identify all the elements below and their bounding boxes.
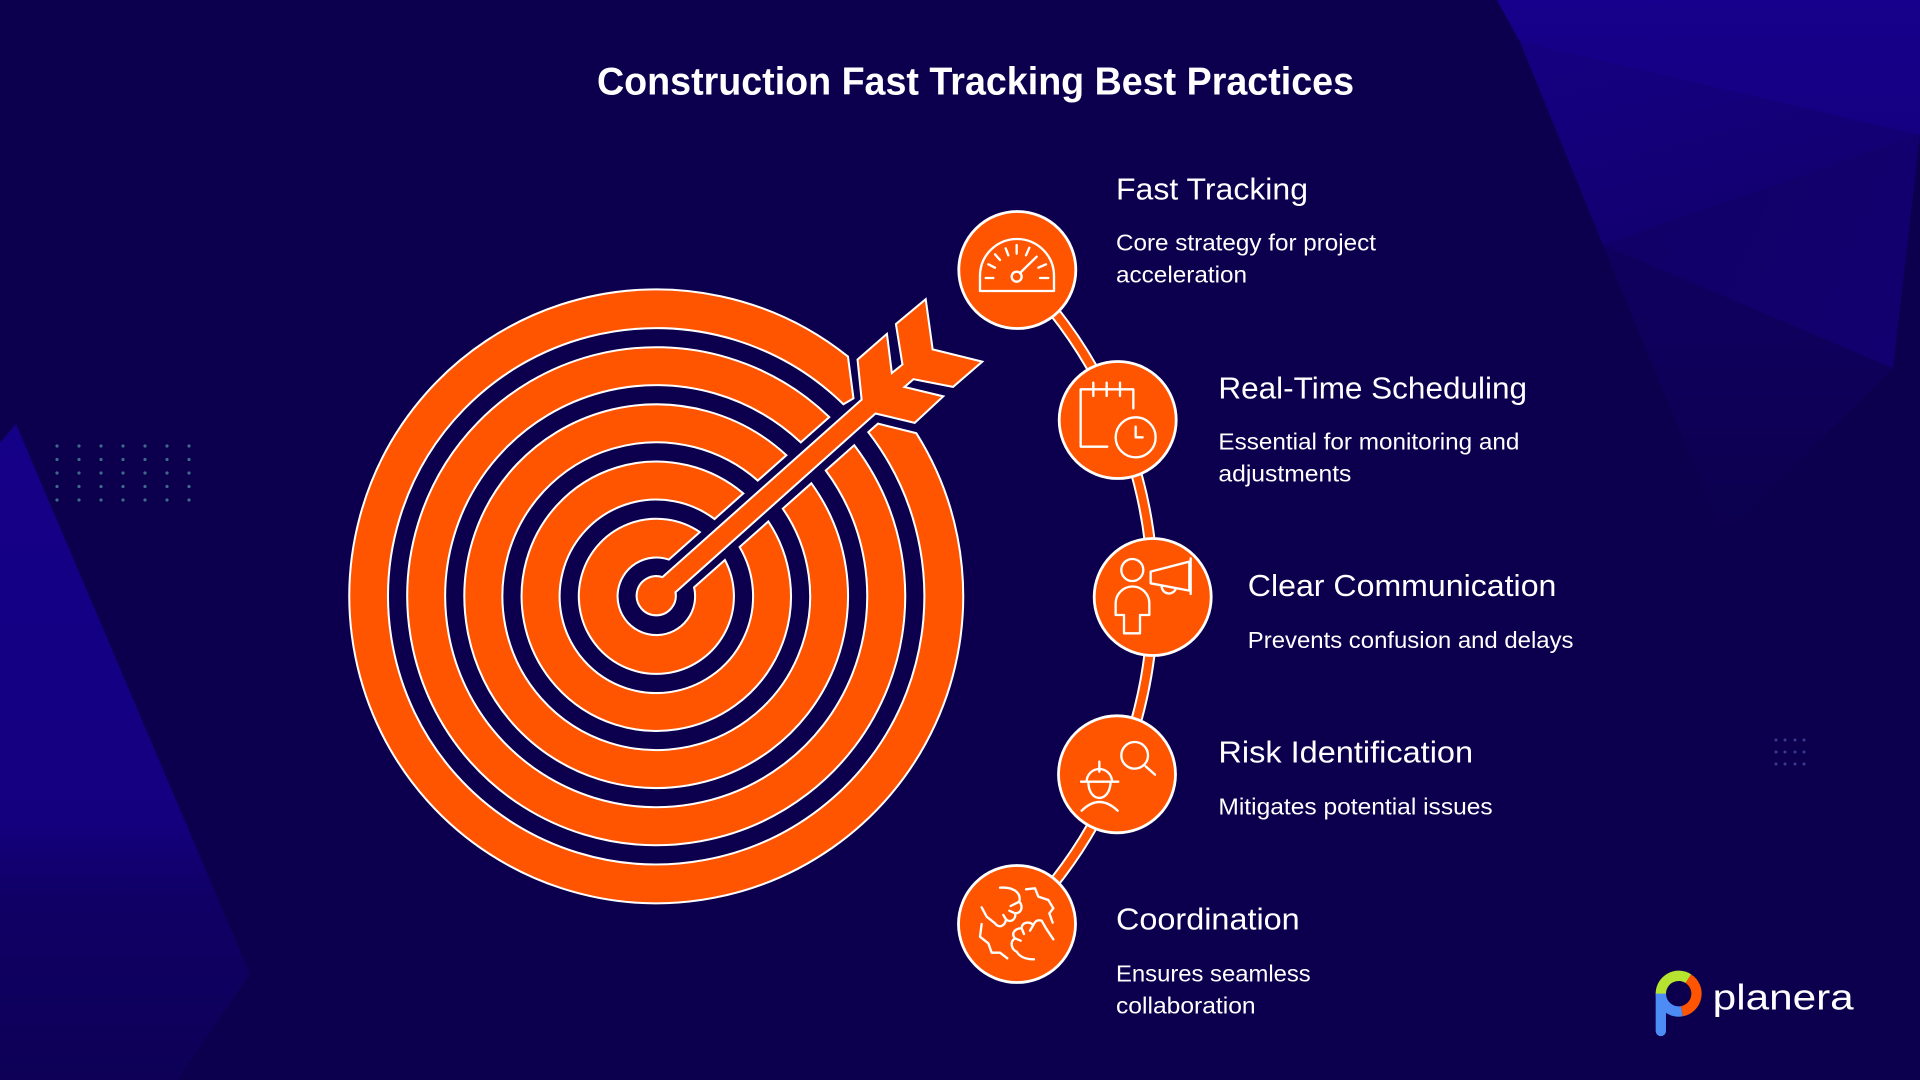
target ring 4: [407, 347, 905, 845]
logo mark: [1661, 976, 1696, 1031]
description: [1116, 230, 1376, 288]
description: Essential for monitoring and: [1218, 429, 1519, 455]
logo wordmark: planera: [1713, 976, 1855, 1017]
background shape: left: [0, 424, 250, 1080]
target ring 1: [579, 519, 734, 674]
description: Core strategy for project: [1116, 230, 1376, 256]
step: Coordination: [958, 866, 1311, 1018]
arrow: [637, 299, 982, 615]
step: Real-Time Scheduling: [1059, 362, 1527, 487]
description: Ensures seamless: [1116, 960, 1311, 986]
icon: clasped hands: [958, 866, 1076, 982]
title: Construction Fast Tracking Best Practices: [597, 60, 1354, 104]
step: Clear Communication: [1094, 538, 1574, 656]
description: Prevents confusion and delays: [1248, 627, 1574, 653]
description: collaboration: [1116, 992, 1256, 1018]
step: Fast Tracking: [959, 172, 1376, 328]
description: Mitigates potential issues: [1218, 794, 1493, 820]
target ring 5: [349, 289, 963, 903]
target ring 2: [522, 462, 791, 731]
logo: planera: [1661, 976, 1855, 1031]
background shape: top right: [1497, 0, 1920, 536]
heading: Coordination: [1116, 901, 1300, 936]
target ring 3: [464, 404, 848, 788]
heading: Clear Communication: [1248, 568, 1556, 603]
icon: worker with magnifier: [1058, 716, 1176, 833]
target with arrow: [349, 289, 982, 903]
description: adjustments: [1218, 461, 1351, 487]
description: [1218, 429, 1519, 487]
heading: Real-Time Scheduling: [1218, 370, 1527, 406]
dot grid: left: [55, 444, 191, 502]
description: [1116, 960, 1311, 1018]
connector arc: [1017, 270, 1153, 924]
step: Risk Identification: [1058, 716, 1493, 833]
icon: calendar with clock: [1059, 362, 1176, 478]
dot grid: right: [1774, 738, 1806, 766]
description: acceleration: [1116, 262, 1247, 288]
heading: Risk Identification: [1218, 735, 1473, 770]
icon: person with megaphone: [1094, 538, 1211, 656]
heading: Fast Tracking: [1116, 172, 1308, 206]
icon: speedometer: [959, 212, 1076, 328]
